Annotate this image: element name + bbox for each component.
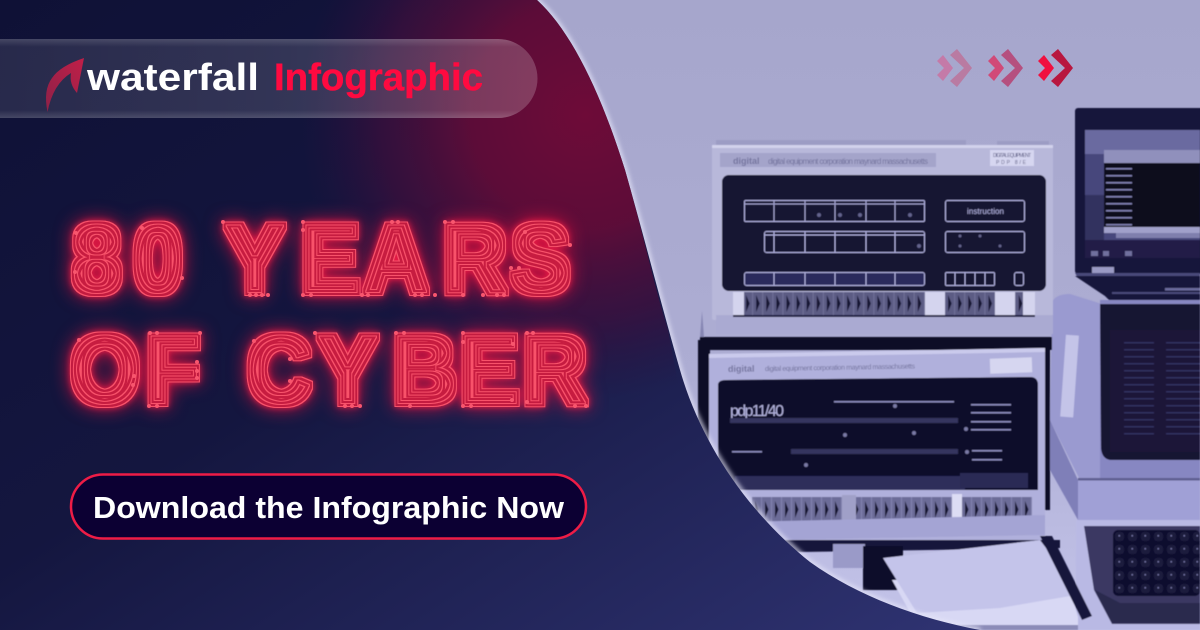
title: 80 years of cyber: 80 YEARS — [72, 205, 570, 313]
lower PDP machine: pdp11/40 — [730, 403, 784, 420]
image: vintage computers — [698, 108, 1200, 630]
upper PDP machine: PDP 8/E — [996, 160, 1027, 166]
right terminal monitor — [1050, 294, 1200, 630]
circuit pads on title letters — [73, 220, 588, 408]
upper PDP machine: digital equipment corporation maynard massachusetts — [768, 157, 928, 166]
title: 80 years of cyber: OF CYBER — [70, 316, 587, 424]
upper PDP machine: instruction — [967, 207, 1004, 216]
upper PDP machine: DIGITAL EQUIPMENT — [993, 153, 1031, 159]
laptop — [1075, 108, 1200, 304]
button: download call to action — [71, 474, 586, 538]
title: 80 years of cyber — [70, 205, 587, 424]
upper console registers — [744, 200, 1024, 286]
paper stack and binder — [833, 536, 1092, 630]
upper PDP machine: digital — [733, 156, 760, 166]
upper PDP machine — [698, 140, 1053, 510]
lower PDP machine: digital equipment corporation maynard massachusetts — [765, 363, 916, 373]
logo pill — [0, 39, 538, 118]
icon: chevron arrows — [937, 49, 1073, 87]
lower PDP machine: digital — [728, 364, 755, 374]
lower PDP machine — [709, 348, 1060, 552]
logo word: waterfall: waterfall — [86, 57, 259, 99]
heading: Infographic: Infographic — [274, 57, 483, 99]
panel: photo background — [500, 0, 1200, 630]
icon: waterfall arrow — [46, 58, 84, 112]
button: download call to action: Download the Infographic Now — [93, 490, 565, 525]
